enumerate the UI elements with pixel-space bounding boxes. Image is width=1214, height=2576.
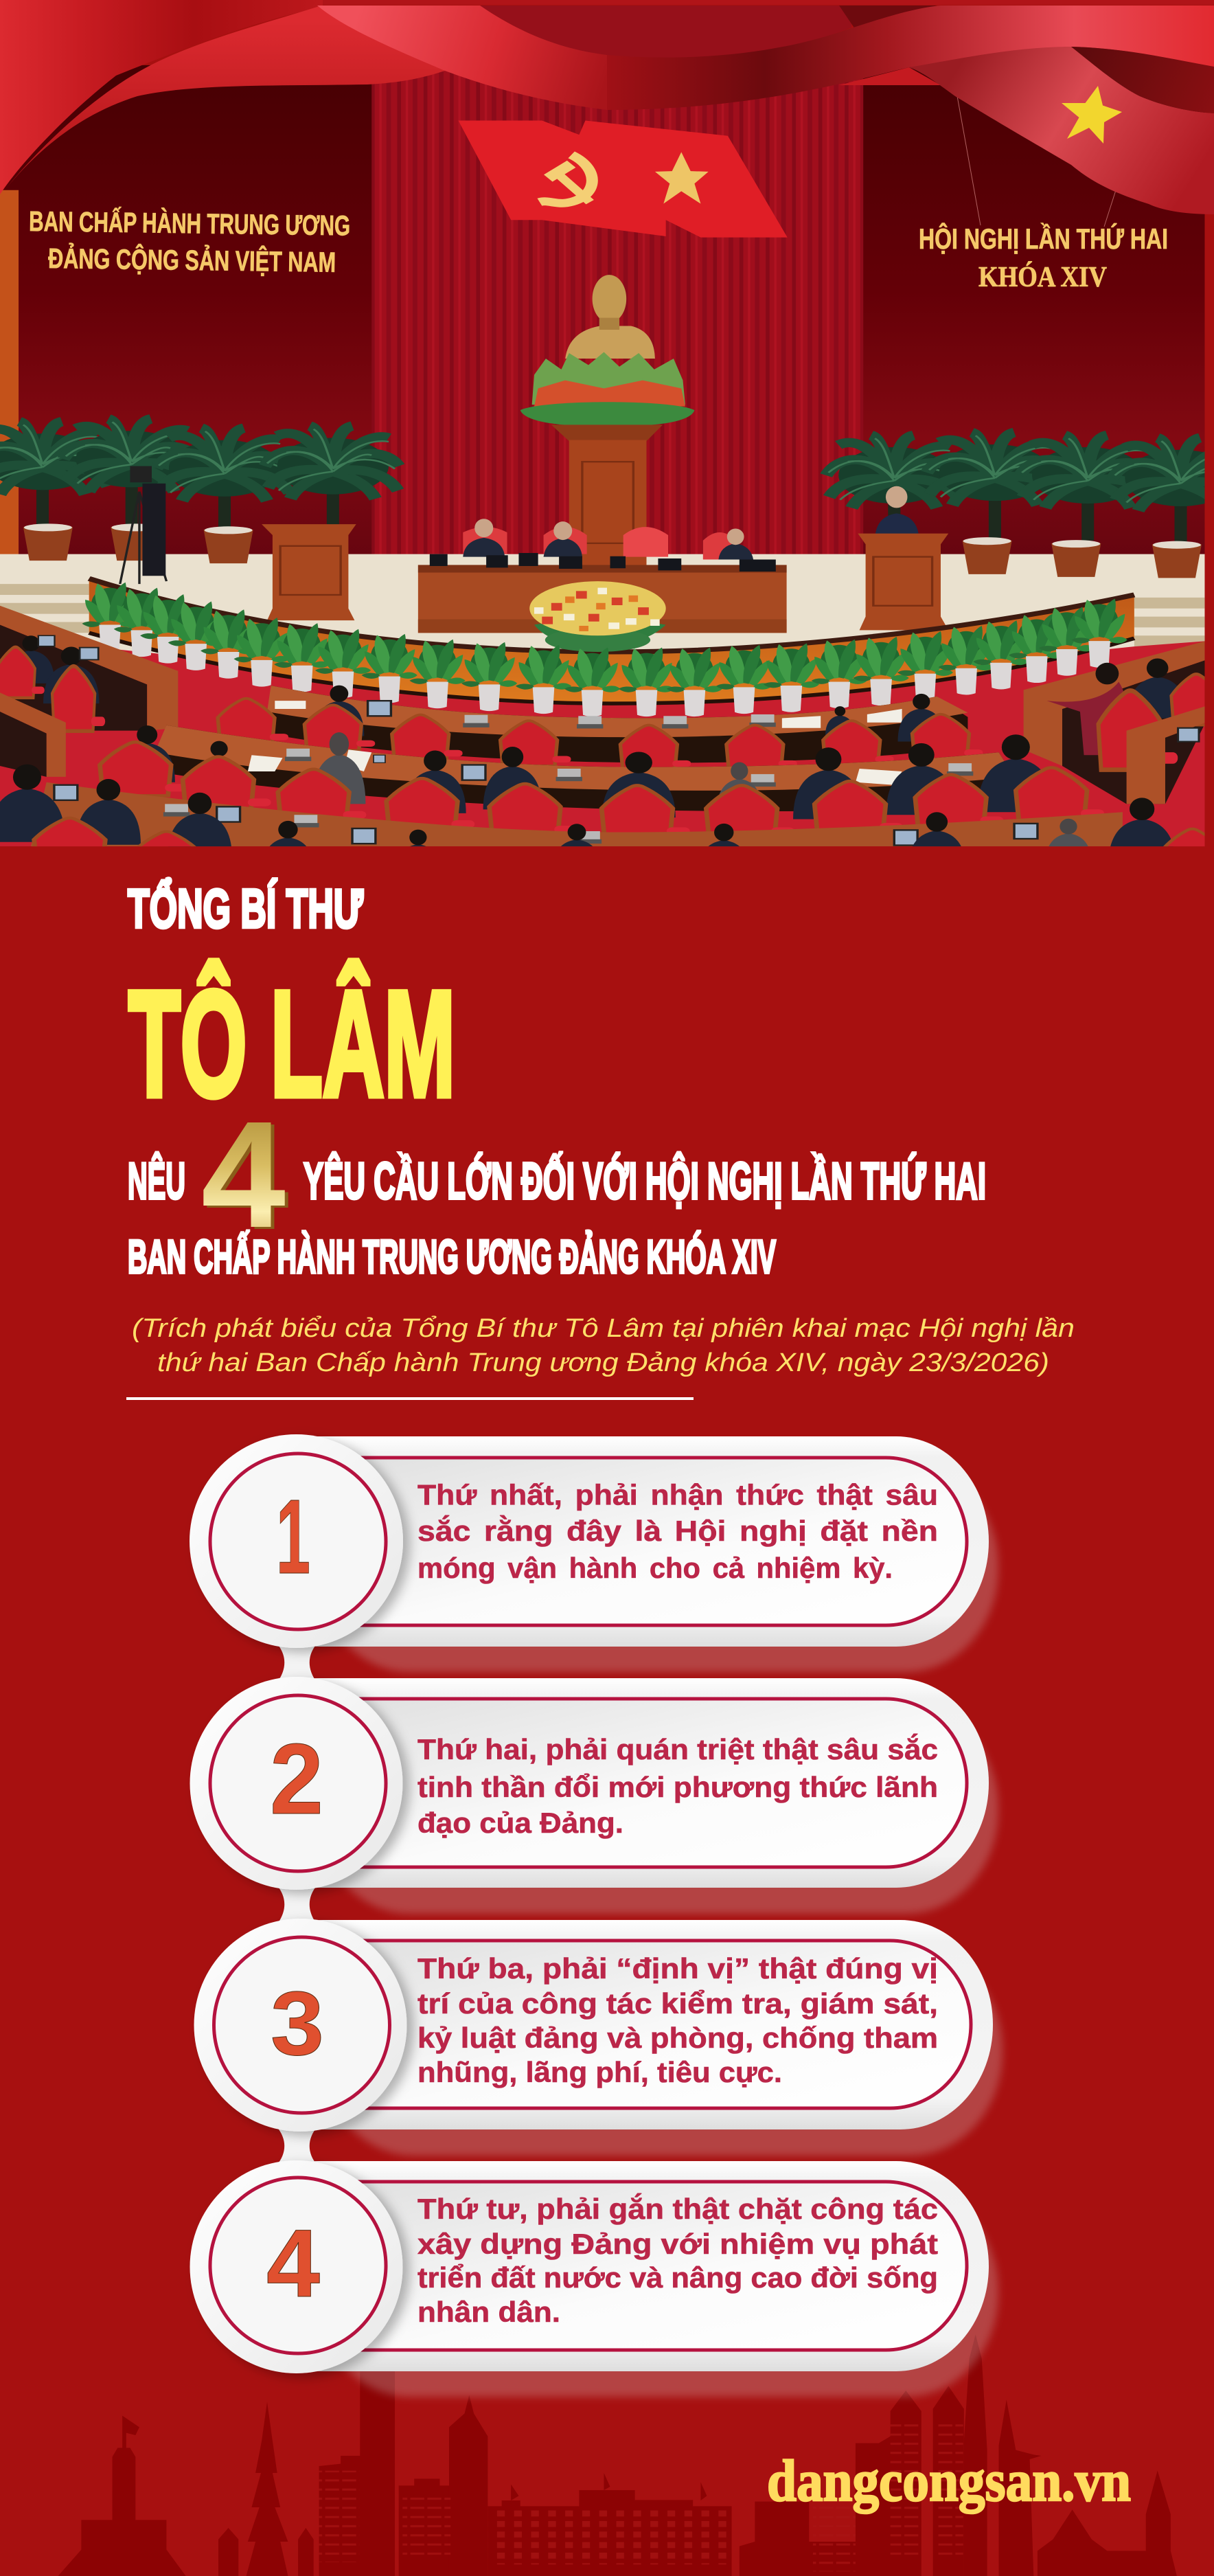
item 4 text [417,2192,938,2328]
headline line 1 [128,1152,986,1210]
source note: (Trích phát biểu của Tổng Bí thư Tô Lâm tại phiên khai mạc Hội nghị lần [132,1314,1075,1343]
delegate chairs row B [100,742,1104,839]
number disc 1: 1 [276,1478,310,1596]
item 3 text: nhũng, lãng phí, tiêu cực. [417,2056,782,2088]
table flowers [529,581,666,652]
hero photo: plenary hall [0,65,1214,877]
item 4 [190,2160,998,2397]
hammer and sickle [540,155,592,203]
headline line 1: NÊU [128,1152,185,1210]
outer pill 3 [231,1920,993,2129]
delegate desk row C [0,765,1214,877]
item 1 text: móng vận hành cho cả nhiệm kỳ. [417,1552,893,1584]
wall lettering left [29,205,350,278]
right delegate block [1024,641,1214,804]
left delegate block [0,606,178,777]
stage front wall [89,578,1134,703]
wall lettering right: KHÓA XIV [978,261,1107,293]
carpet [0,609,1206,846]
curtain [371,71,863,567]
connector 2-3 [277,1885,317,1925]
speaker at right podium [875,486,919,538]
delegate desk row A [267,686,967,762]
item 4 text: Thứ tư, phải gắn thật chặt công tác [417,2192,938,2225]
connector 1-2 [277,1643,317,1683]
item 4 text: triển đất nước và nâng cao đời sống [417,2261,938,2294]
item 3 text: Thứ ba, phải “định vị” thật đúng vị [417,1952,938,1985]
item 2 text: Thứ hai, phải quán triệt thật sâu sắc [417,1732,938,1765]
party flag [459,121,788,238]
shadow 3 [321,1947,1003,2156]
gold number 4: 4 [205,1092,289,1261]
source note: thứ hai Ban Chấp hành Trung ương Đảng khóa XIV, ngày 23/3/2026) [157,1348,1049,1377]
inner panel 1 [227,1458,967,1625]
item 1 [190,1434,998,1683]
item 1 text: Thứ nhất, phải nhận thức thật sâu [417,1478,938,1511]
presidium members [463,519,753,560]
item 3 [194,1919,1003,2165]
presidium chairs [463,527,735,560]
delegate desk row B [119,725,1054,820]
item 4 text: xây dựng Đảng với nhiệm vụ phát [417,2228,938,2260]
wall lettering left: ĐẢNG CỘNG SẢN VIỆT NAM [48,242,336,278]
outer pill 4 [227,2161,989,2371]
item 2 [190,1677,998,1925]
number disc 4 [190,2160,402,2373]
number disc 3: 3 [271,1973,324,2074]
palms right [826,432,1214,578]
source note [132,1314,1075,1377]
left podium [262,524,356,620]
right margin strip [1205,206,1214,846]
item 3 text: trí của công tác kiểm tra, giám sát, [417,1987,938,2020]
number disc 4: 4 [266,2209,320,2317]
inner panel 2 [227,1699,967,1867]
cameraman [120,466,166,584]
divider rule [126,1397,694,1400]
pedestal [551,425,663,567]
title: general secretary: TỔNG BÍ THƯ [128,878,363,939]
yellow star on ribbon [1062,86,1122,144]
right podium [858,534,948,630]
item 1 text [417,1478,938,1584]
item 2 text: đạo của Đảng. [417,1807,623,1839]
inner panel 4 [227,2182,967,2350]
wall lettering right [919,96,1168,293]
shadow 1 [317,1463,998,1672]
number disc 2: 2 [270,1723,323,1835]
top ribbon banner [0,0,1214,214]
shadow 4 [317,2188,998,2397]
wall lettering left: BAN CHẤP HÀNH TRUNG ƯƠNG [29,205,350,242]
connector 3-4 [277,2127,317,2165]
number disc 3 [194,1919,406,2132]
title: name: TÔ LÂM [128,960,455,1128]
gold star [655,152,709,204]
item 1 text: sắc rằng đây là Hội nghị đặt nền [417,1514,938,1547]
wood panel [0,190,19,562]
number disc 2 [190,1677,402,1890]
presidium table [418,553,787,633]
gold number 4: 4 [201,1089,286,1259]
palms left [0,419,399,563]
item 2 text: tinh thần đổi mới phương thức lãnh [417,1771,938,1803]
bust of Ho Chi Minh [565,275,655,359]
item 4 text: nhân dân. [417,2296,560,2328]
stairs left [0,584,89,633]
item 3 text: kỷ luật đảng và phòng, chống tham [417,2022,938,2054]
footer logo text: dangcongsan.vn [767,2448,1131,2513]
inner panel 3 [231,1941,971,2108]
row of potted plants [82,583,1127,716]
right wall [862,65,1206,565]
flower arrangement on pedestal [520,352,694,427]
outer pill 1 [227,1436,989,1647]
floor [0,554,1204,654]
shadow 2 [317,1705,998,1914]
left wall [0,65,373,565]
delegate chairs row A [218,699,983,770]
city skyline silhouette [58,2334,1177,2576]
outer pill 2 [227,1678,989,1888]
item 2 text [417,1732,938,1839]
item 3 text [417,1952,938,2088]
number disc 1 [190,1434,403,1648]
stairs right [1134,598,1206,646]
